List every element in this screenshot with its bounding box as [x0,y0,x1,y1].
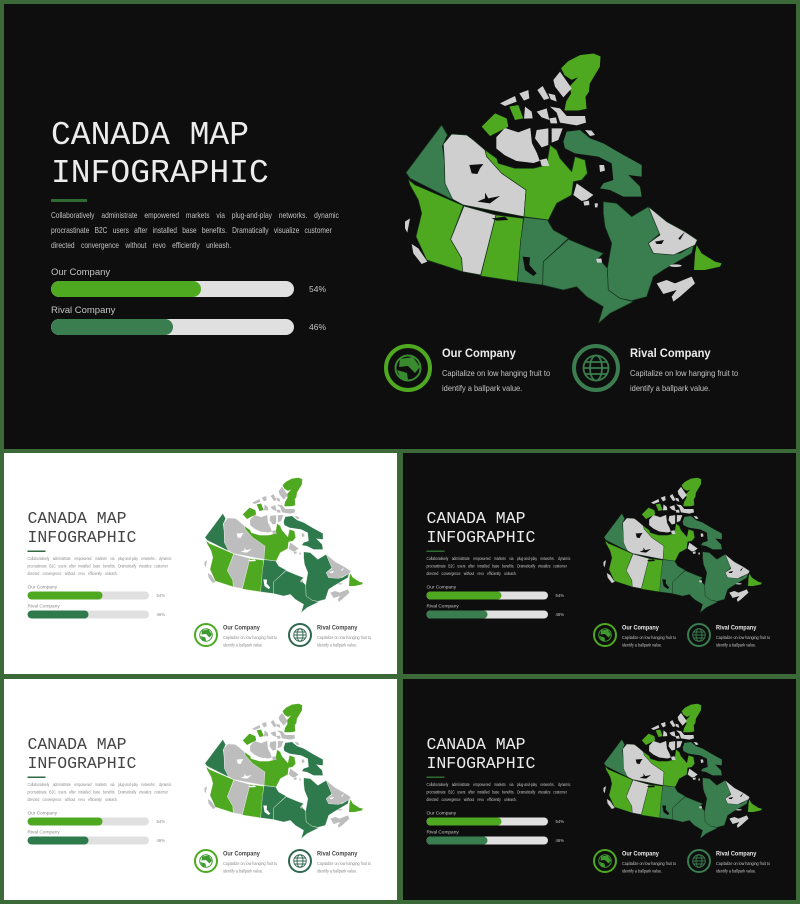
legend: our company [442,346,550,393]
text block: procrastinate B2C users after installed base benefits. Dramatically visualize customer [426,564,567,568]
title [28,510,136,547]
panel: dark slide, row 2 [403,453,796,674]
legend: our company [622,850,676,874]
legend: rival company: Capitalize on low hanging fruit to identify a ballpark value. [317,635,371,648]
icon: globe [572,344,620,392]
text block [28,782,172,802]
legend: our company: Our Company [622,624,659,631]
panel: main dark slide [4,4,796,449]
bar chart [426,550,564,618]
title [28,736,136,773]
legend: rival company [317,624,371,648]
legend: our company: Capitalize on low hanging fruit to identify a ballpark value. [622,635,676,648]
legend: rival company [716,850,770,874]
text block [426,782,570,802]
title: INFOGRAPHIC [426,528,535,547]
bar chart: 54% [309,284,326,294]
legend: our company: Capitalize on low hanging fruit to identify a ballpark value. [223,635,277,648]
icon: globe [288,849,312,873]
bar chart [51,199,326,335]
bar chart: 46% [156,838,165,843]
bar chart [28,776,165,844]
icon: globe [687,849,711,873]
legend: our company: Our Company [622,850,659,857]
bar chart: Rival Company [426,604,459,609]
legend: rival company [317,850,371,874]
bar chart: Our Company [51,267,110,278]
legend: rival company: Capitalize on low hanging fruit to identify a ballpark value. [716,635,770,648]
map of Canada [204,704,363,838]
title [426,510,535,547]
legend: rival company: Capitalize on low hanging fruit to identify a ballpark value. [716,861,770,874]
bar chart: Our Company [28,584,57,590]
legend: rival company: Rival Company [716,850,756,857]
text block: Collaboratively administrate empowered markets via plug-and-play networks. dynamic [426,556,570,561]
text block: directed convergence without revo efficiently unleash. [28,797,118,802]
icon: earth [384,344,432,392]
bar chart: 54% [156,819,165,824]
legend: rival company [716,624,770,648]
bar chart [28,550,165,618]
bar chart: 46% [309,322,326,332]
text block: procrastinate B2C users after installed base benefits. Dramatically visualize customer [51,225,332,235]
text block: directed convergence without revo efficiently unleash. [426,797,517,802]
icon: earth [593,849,617,873]
text block: Collaboratively administrate empowered markets via plug-and-play networks. dynamic [426,782,570,787]
bar chart: 46% [556,612,564,617]
bar chart: Our Company [426,810,456,816]
text block: Collaboratively administrate empowered markets via plug-and-play networks. dynamic [51,210,339,220]
text block: directed convergence without revo efficiently unleash. [28,571,118,576]
text block: procrastinate B2C users after installed base benefits. Dramatically visualize customer [426,790,567,794]
title: CANADA MAP [28,736,127,754]
legend: rival company: Rival Company [317,624,357,631]
title [426,736,535,773]
legend: rival company: Rival Company [317,850,357,857]
bar chart: Rival Company [28,830,60,835]
legend: rival company [630,346,738,393]
bar chart: Our Company [426,584,456,590]
text block: directed convergence without revo efficiently unleash. [51,240,231,250]
title: INFOGRAPHIC [426,754,535,773]
text block: Collaboratively administrate empowered markets via plug-and-play networks. dynamic [28,782,171,787]
text block: Collaboratively administrate empowered markets via plug-and-play networks. dynamic [28,556,171,561]
panel: light slide, row 2 [4,453,397,674]
bar chart: 54% [556,819,564,824]
title: CANADA MAP [426,736,526,754]
icon: earth [593,623,617,647]
icon: earth [194,623,218,647]
bar chart: Rival Company [28,604,60,609]
title: INFOGRAPHIC [51,154,269,192]
legend: our company: Our Company [442,346,516,360]
legend: our company: Capitalize on low hanging fruit to identify a ballpark value. [442,368,550,393]
bar chart: Rival Company [426,830,459,835]
bar chart: Rival Company [51,305,115,316]
text block [426,556,570,576]
legend: rival company: Capitalize on low hanging fruit to identify a ballpark value. [317,861,371,874]
map of Canada [204,478,363,612]
bar chart: 54% [556,593,564,598]
icon: globe [687,623,711,647]
bar chart [426,776,564,844]
icon: globe [288,623,312,647]
panel: light slide, row 3 [4,679,397,900]
panel: dark slide, row 3 [403,679,796,900]
bar chart: 46% [156,612,165,617]
text block: directed convergence without revo efficiently unleash. [426,571,517,576]
bar chart: 46% [556,838,564,843]
legend: our company [622,624,676,648]
legend: our company [223,624,277,648]
legend: our company: Capitalize on low hanging fruit to identify a ballpark value. [622,861,676,874]
title: CANADA MAP [426,510,526,528]
title: CANADA MAP [51,117,249,154]
map of Canada [604,704,762,839]
map of Canada [405,54,722,324]
bar chart: Our Company [28,810,57,816]
legend: rival company: Rival Company [630,346,711,360]
text block [28,556,172,576]
icon: earth [194,849,218,873]
legend: our company [223,850,277,874]
title: INFOGRAPHIC [28,528,136,547]
legend: our company: Our Company [223,850,260,857]
title: CANADA MAP [28,510,127,528]
text block: procrastinate B2C users after installed base benefits. Dramatically visualize customer [28,790,168,794]
title: INFOGRAPHIC [28,754,136,773]
text block: procrastinate B2C users after installed base benefits. Dramatically visualize customer [28,564,168,568]
legend: rival company: Capitalize on low hanging fruit to identify a ballpark value. [630,368,738,393]
legend: our company: Capitalize on low hanging fruit to identify a ballpark value. [223,861,277,874]
legend: our company: Our Company [223,624,260,631]
legend: rival company: Rival Company [716,624,756,631]
title [51,117,269,192]
map of Canada [604,478,762,613]
bar chart: 54% [156,593,165,598]
text block [51,210,339,250]
